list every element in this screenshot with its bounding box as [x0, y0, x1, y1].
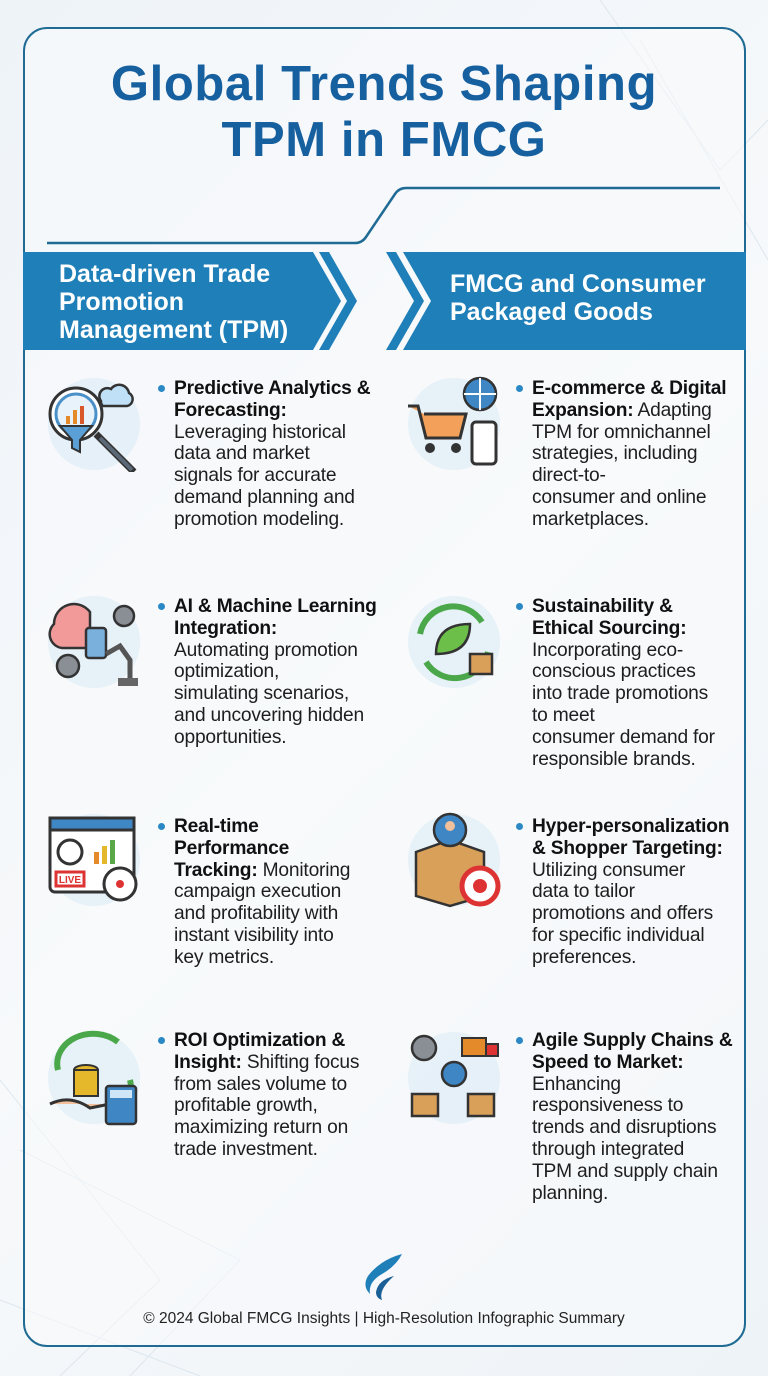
footer: © 2024 Global FMCG Insights | High-Resolution Infographic Summary	[143, 1310, 625, 1327]
item: ROI optimization: from sales volume to	[174, 1074, 347, 1095]
logo	[365, 1254, 402, 1300]
item: real-time tracking: Real-time	[174, 816, 259, 837]
item: AI & ML: optimization,	[174, 661, 279, 682]
banner: left: Promotion	[59, 288, 184, 316]
text: trade investment.	[174, 1139, 318, 1160]
item: AI & ML: Automating promotion	[174, 640, 358, 661]
item: hyper-personalization: preferences.	[532, 947, 636, 968]
item: predictive analytics: Leveraging historical	[174, 422, 346, 443]
item: AI & ML: AI & Machine Learning	[174, 596, 377, 617]
banner: right: Packaged Goods	[450, 298, 653, 326]
item: sustainability: to meet	[532, 705, 595, 726]
item: AI & ML: and uncovering hidden	[174, 705, 364, 726]
item: agile supply chain: Agile Supply Chains &	[532, 1030, 732, 1051]
icon: sustainability	[408, 596, 500, 688]
banner: left: Data-driven Trade	[59, 260, 270, 288]
item: e-commerce: TPM for omnichannel	[532, 422, 711, 443]
item: real-time tracking: campaign execution	[174, 881, 341, 902]
item: agile supply chain: trends and disruptions	[532, 1117, 716, 1138]
item: predictive analytics: data and market	[174, 443, 310, 464]
item: real-time tracking: and profitability with	[174, 903, 338, 924]
item: agile supply chain: responsiveness to	[532, 1095, 683, 1116]
item: real-time tracking: key metrics.	[174, 947, 274, 968]
banner: left	[23, 252, 357, 350]
banner: left: Management (TPM)	[59, 316, 288, 344]
item: AI & ML: opportunities.	[174, 727, 286, 748]
item: ROI optimization: ROI Optimization &	[174, 1030, 345, 1051]
item: ROI optimization: maximizing return on	[174, 1117, 348, 1138]
item: e-commerce	[516, 378, 726, 530]
item: agile supply chain: Speed to Market:	[532, 1052, 683, 1073]
item: sustainability	[516, 596, 715, 770]
icon: agile supply chain	[408, 1032, 500, 1124]
item: e-commerce: Expansion: Adapting	[532, 400, 712, 421]
item: agile supply chain: Enhancing	[532, 1074, 621, 1095]
icon: real-time tracking: LIVE	[59, 875, 81, 886]
item: sustainability: Incorporating eco-	[532, 640, 683, 661]
title	[111, 57, 657, 167]
icon: predictive analytics	[48, 378, 140, 472]
item: real-time tracking	[158, 816, 350, 968]
item: ROI optimization	[158, 1030, 359, 1160]
item: ROI optimization: profitable growth,	[174, 1095, 318, 1116]
item: real-time tracking: Performance	[174, 838, 289, 859]
item: e-commerce: consumer and online	[532, 487, 706, 508]
icon: hyper-personalization	[408, 812, 500, 908]
item: hyper-personalization: & Shopper Targeting:	[532, 838, 723, 859]
banner: right	[386, 252, 746, 350]
item: hyper-personalization: for specific individual	[532, 925, 704, 946]
item: sustainability: into trade promotions	[532, 683, 708, 704]
item: e-commerce: strategies, including	[532, 443, 697, 464]
item: hyper-personalization	[516, 816, 729, 968]
item: predictive analytics: Predictive Analytics &	[174, 378, 370, 399]
banner: right: FMCG and Consumer	[450, 270, 706, 298]
item: predictive analytics: demand planning and	[174, 487, 355, 508]
item: sustainability: Sustainability &	[532, 596, 673, 617]
item: agile supply chain: planning.	[532, 1183, 608, 1204]
item: AI & ML	[158, 596, 377, 748]
icon: AI machine learning	[48, 596, 140, 688]
title underline	[47, 186, 720, 244]
item: predictive analytics: signals for accurate	[174, 465, 336, 486]
icon: e-commerce	[408, 376, 500, 470]
item: sustainability: consumer demand for	[532, 727, 715, 748]
item: sustainability: conscious practices	[532, 661, 696, 682]
item: hyper-personalization: Hyper-personalization	[532, 816, 729, 837]
item: hyper-personalization: data to tailor	[532, 881, 635, 902]
title: Global Trends Shaping	[111, 57, 657, 111]
item: sustainability: Ethical Sourcing:	[532, 618, 686, 639]
item: AI & ML: Integration:	[174, 618, 277, 639]
item: agile supply chain: through integrated	[532, 1139, 684, 1160]
item: hyper-personalization: Utilizing consumer	[532, 860, 685, 881]
item: sustainability: responsible brands.	[532, 749, 696, 770]
item: e-commerce: E-commerce & Digital	[532, 378, 726, 399]
item: e-commerce: marketplaces.	[532, 509, 649, 530]
item: predictive analytics	[158, 378, 370, 530]
item: agile supply chain	[516, 1030, 732, 1204]
item: real-time tracking: Tracking: Monitoring	[174, 860, 350, 881]
item: e-commerce: direct-to-	[532, 465, 606, 486]
item: agile supply chain: TPM and supply chain	[532, 1161, 718, 1182]
item: AI & ML: simulating scenarios,	[174, 683, 349, 704]
icon: real-time tracking	[48, 814, 140, 906]
item: real-time tracking: instant visibility into	[174, 925, 334, 946]
title: TPM in FMCG	[221, 113, 547, 167]
item: ROI optimization: Insight: Shifting focus	[174, 1052, 359, 1073]
item: hyper-personalization: promotions and offers	[532, 903, 713, 924]
icon: ROI optimization	[48, 1030, 140, 1126]
item: predictive analytics: promotion modeling.	[174, 509, 344, 530]
item: predictive analytics: Forecasting:	[174, 400, 287, 421]
